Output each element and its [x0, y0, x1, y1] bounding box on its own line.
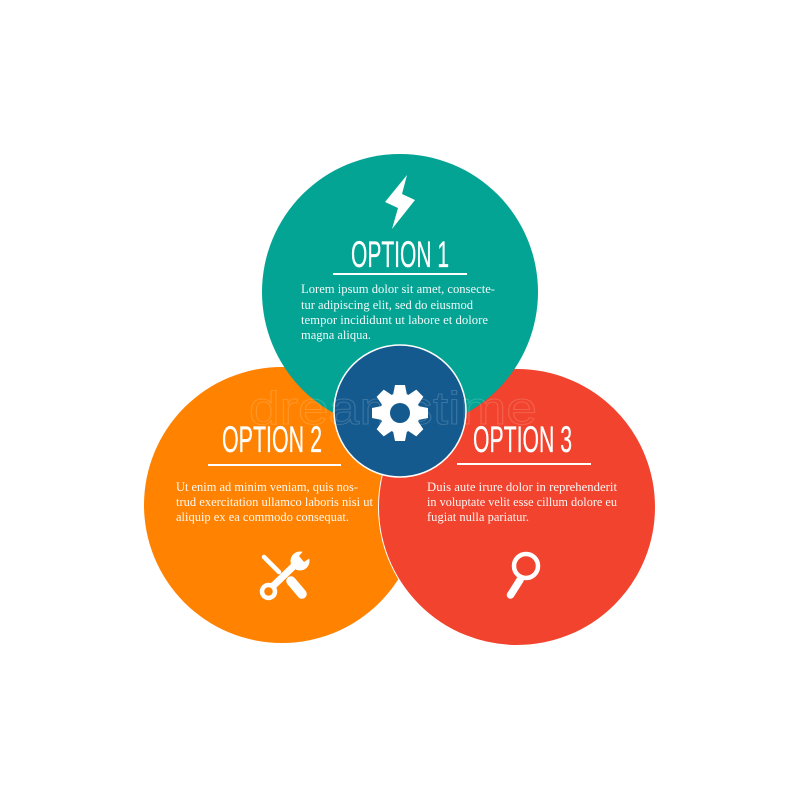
text: option 3 body: fugiat nulla pariatur.: [427, 510, 529, 524]
heading underline: [333, 273, 467, 275]
text: option 1 body: tur adipiscing elit, sed do eiusmod: [301, 298, 474, 312]
heading: option 2: OPTION 2: [222, 418, 322, 460]
heading: option 1: OPTION 1: [351, 233, 449, 275]
circle: option 2 orange: [144, 367, 420, 643]
text: option 1 body: magna aliqua.: [301, 328, 371, 342]
circle: center blue: [334, 345, 466, 477]
circle: option 3 red: [378, 368, 656, 646]
icon: magnifying glass: [510, 554, 538, 595]
panel: option 1 content: [301, 175, 495, 342]
text: option 2 body: aliquip ex ea commodo consequat.: [176, 510, 349, 524]
text: option 3 body: Duis aute irure dolor in reprehenderit: [427, 480, 617, 494]
panel: option 2 content: [176, 418, 373, 598]
icon: wrench and screwdriver: [262, 548, 313, 598]
icon: lightning bolt: [385, 175, 415, 229]
circle: option 1 teal: [262, 154, 538, 430]
text: option 1 body: tempor incididunt ut labore et dolore: [301, 313, 488, 327]
watermark: dreamstime: [249, 382, 537, 434]
text: option 1 body: Lorem ipsum dolor sit amet, consecte-: [301, 282, 495, 296]
text: option 2 body: Ut enim ad minim veniam, quis nos-: [176, 480, 358, 494]
heading: option 3: OPTION 3: [473, 418, 572, 460]
panel: option 3 content: [427, 418, 618, 595]
text: option 2 body: trud exercitation ullamco laboris nisi ut: [176, 495, 373, 509]
heading underline: [208, 464, 341, 466]
heading underline: [457, 463, 591, 465]
text: option 3 body: in voluptate velit esse cillum dolore eu: [427, 495, 618, 509]
icon: gear: [372, 385, 428, 441]
